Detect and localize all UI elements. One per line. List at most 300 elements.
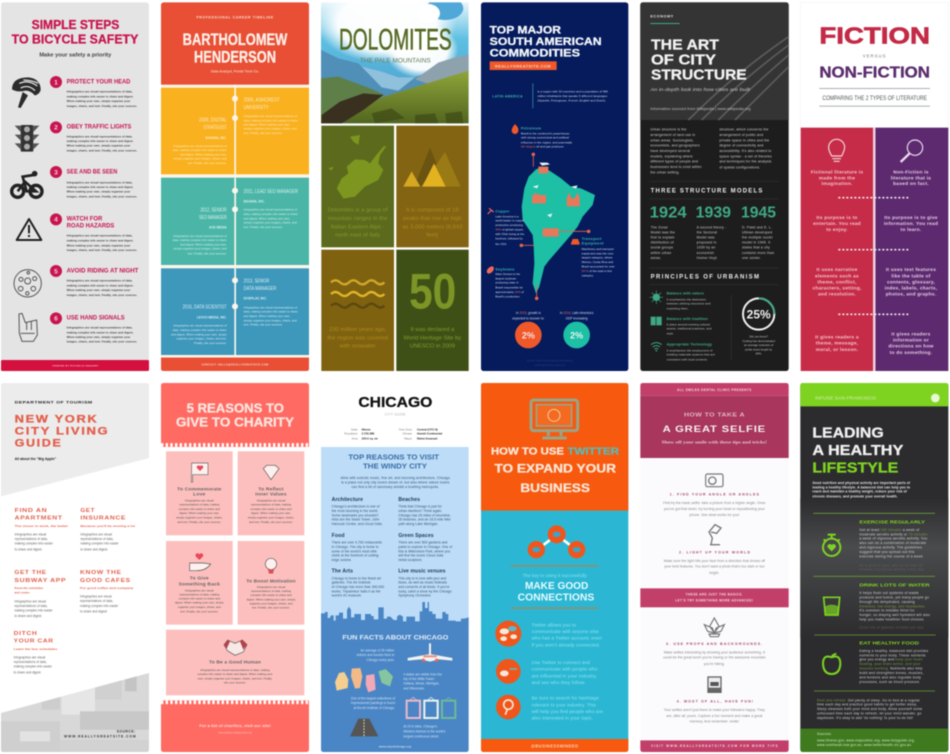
- text: the arts: Chicago is home to the finest art: [332, 576, 381, 580]
- column: non-fiction: Its purpose is to give: [884, 215, 938, 221]
- city facts: [344, 427, 442, 440]
- step 4: ROAD HAZARDS: [67, 223, 114, 229]
- icon: petroleum drop: [512, 124, 518, 134]
- model 1924: Model was the: [651, 230, 675, 234]
- column: non-fiction: directions on how: [888, 344, 934, 350]
- timeline band 2005-2009: [161, 85, 309, 358]
- intro text: [812, 481, 911, 498]
- principle: balance with nature: between utilizing resources and: [667, 302, 711, 306]
- section: food: give you energy and keep your heart: [859, 658, 922, 662]
- panel: reasons to give to charity infographic: [161, 383, 309, 752]
- column: fiction: It uses narrative: [816, 267, 858, 273]
- Latin America intro: million inhabitants that speaks 5 different languages: [537, 94, 608, 98]
- section: water: It's common to mistake thirst for: [859, 609, 915, 613]
- icon: monitor with bird: [531, 400, 578, 438]
- text: the arts: of Chicago has more than 300,000: [332, 585, 384, 589]
- section: exercise: Get at least 150 minutes a week of: [859, 528, 919, 532]
- fact: four states: 4 states are visible from the: [403, 672, 442, 676]
- section: water: tiredness, low energy, and headaches.: [859, 604, 926, 608]
- column: fiction: Fictional literature is: [811, 169, 863, 175]
- city facts: Illinois: [362, 427, 371, 431]
- stat: 2% growth: In 2015, growth is: [516, 311, 541, 315]
- source note: Source: https://www.statista.com/statistics: [527, 360, 574, 363]
- title: TO EXPAND YOUR: [494, 462, 616, 476]
- section: find an apartment: making complex info easier: [15, 542, 53, 546]
- icon: warning triangle: [17, 219, 41, 240]
- title: COMMODITIES: [490, 48, 580, 60]
- timeline band 2013-2016: LEXVO MEDIA, INC.: [197, 315, 227, 319]
- icon: airplane: [408, 643, 452, 662]
- sources footer: Sources:: [817, 732, 832, 736]
- tip 2: 2. LIGHT UP YOUR WORLD: [679, 551, 750, 555]
- step 4: [50, 213, 137, 252]
- did you know note: Cooling has demonstrated: [742, 339, 775, 343]
- column: fiction: entertain. You read: [813, 221, 861, 227]
- timeline band 2013-2016: and digest. When making your own,: [244, 314, 290, 318]
- panel: give something back: digest. When making your own, simply: [175, 601, 224, 605]
- section: ditch your car: YOUR CAR: [14, 639, 54, 645]
- model 1924: The Zonal: [651, 225, 668, 229]
- fact: visitors: Chicago every year.: [366, 658, 394, 662]
- model 1945: [741, 205, 776, 260]
- timeline band 2013-2016: text. Finally, cite your sources.: [244, 323, 283, 327]
- text: copper: the USA.: [495, 242, 507, 246]
- step 4: images, charts, and text. Finally, cite your sources.: [67, 248, 137, 252]
- text: food: chefs at the forefront of cutting-: [332, 554, 379, 558]
- panel: how to use Twitter infographic: [481, 383, 628, 752]
- heading principles of urbanism: PRINCIPLES OF URBANISM: [651, 275, 759, 281]
- heading: make good connections: The key to using it successfully: [523, 573, 587, 578]
- icon: photo: [707, 676, 722, 693]
- footer contact: CONTACT: HELLO@REALLYGREATSITE.COM: [201, 362, 269, 366]
- stat: 2% GDP: GDP increasing: [566, 316, 588, 320]
- step 6: images, charts, and text. Finally, cite your sources.: [67, 340, 137, 344]
- section: get insurance: [80, 508, 135, 551]
- header with title: 5 REASONS TO: [187, 402, 284, 416]
- icon: stopwatch: [823, 535, 840, 556]
- tip 1: [663, 493, 766, 517]
- step 5: images, charts, and text. Finally, cite your sources.: [67, 293, 137, 297]
- panel: give something back: representations of data, making: [179, 592, 220, 596]
- step 4: When making your own, simply organize your: [67, 243, 131, 247]
- principle: appropriate technology: consistent with local contexts: [667, 357, 708, 361]
- intro text: urban areas. Sociologists,: [650, 138, 694, 142]
- section: get insurance: representations of data,: [80, 537, 114, 541]
- tip 2: bright.: [709, 571, 719, 575]
- section: top reasons: can find a bit of sanctuary amidst a bustling metropolis.: [351, 485, 439, 489]
- intro text: the urban setting.: [650, 170, 680, 174]
- step 6: Infographics are visual representations of data,: [67, 326, 133, 330]
- fact: art institute: Impressionist paintings is found: [351, 701, 395, 705]
- text: soybeans: Soybeans: [495, 268, 515, 272]
- timeline band 2013-2016: 2016, DATA SCIENTIST: [183, 305, 227, 311]
- timeline band 2013-2016: Infographics are visual representations of: [173, 324, 227, 328]
- icon: transport car: [571, 239, 580, 245]
- timeline band 2005-2009: UNIVERSITY: [244, 105, 269, 111]
- model 1939: A second theory -: [697, 225, 726, 229]
- model 1945: Ullman developed: [742, 230, 772, 234]
- panel: map of Europe: Dolomites is a group of: [328, 208, 388, 214]
- panel: seawater: the region was covered: [327, 335, 388, 341]
- panel: reflect inner values: simply organize your images, charts,: [248, 515, 294, 519]
- panel: reflect inner values: digest. When making your own,: [251, 511, 291, 515]
- title: VERSUS: [863, 53, 887, 58]
- model 1945: 1945: [741, 205, 776, 222]
- intro text: space syntax - a set of theories: [719, 154, 772, 158]
- city facts: Humid Continental: [417, 432, 442, 436]
- header: Show off your smile with these tips and tricks!: [662, 439, 767, 444]
- website: www.cityofchicago.org: [378, 744, 411, 748]
- intro text: Good nutrition and physical activity are important parts of: [812, 481, 911, 485]
- text: architecture: miss are the Sears Tower, John: [332, 518, 380, 522]
- city facts: State: [351, 427, 358, 431]
- text: copper: with Chile being at the: [495, 232, 525, 236]
- section: water: [859, 582, 931, 630]
- intro text: arrangement of land use in: [650, 133, 695, 137]
- section: find an apartment: FIND AN: [15, 508, 47, 514]
- step 6: 6: [54, 316, 58, 323]
- text: green spaces: this is Millennium Park, where you: [398, 549, 450, 553]
- column: non-fiction: like the table of: [891, 273, 931, 279]
- rest and refresh: Rest and refresh. Get plenty of sleep. Go to bed at a regular: [817, 698, 921, 702]
- tip 1: communicate with anyone else: [532, 629, 599, 635]
- section: get insurance: INSURANCE: [80, 516, 126, 522]
- text: green spaces: metal sculpture.: [398, 558, 423, 562]
- title: THE ART: [651, 37, 719, 53]
- text: transport equipment: category.: [582, 274, 594, 278]
- text: soybeans: Mato Grosso is the: [495, 272, 520, 276]
- principle: balance with tradition: assets, traditional practices, and: [667, 327, 712, 331]
- timeline band 2011-2012: data, making complex info easier to share: [173, 238, 227, 242]
- city facts: Mayor: [404, 436, 412, 440]
- text: soybeans: largest soybean: [495, 276, 517, 280]
- city facts: Population: [344, 432, 358, 436]
- section: get the subway app: and routes: [14, 591, 30, 595]
- panel: reflect inner values: and text. Finally, cite your sources.: [249, 520, 293, 524]
- text: copper: forefront, followed by: [495, 236, 523, 240]
- panel: good human: own, simply organize your images, charts, and text. Finally,: [198, 676, 273, 680]
- timeline band 2011-2012: data, making complex info easier to share: [244, 212, 298, 216]
- timeline band 2011-2012: simply organize your images, charts, and: [244, 221, 297, 225]
- header text: PROFESSIONAL CAREER TIMELINE: [196, 15, 274, 19]
- section: water: help you make healthier food choices.: [859, 618, 925, 622]
- fact: western avenue: longest continuous street.: [403, 734, 439, 738]
- city facts: Climate: [402, 432, 412, 436]
- section: exercise: moderate aerobic activity or 75 minutes: [859, 532, 927, 536]
- icon: soybean: [485, 265, 495, 275]
- band: basics: LET'S TRY SOMETHING MORE ADVANCED!: [675, 599, 753, 603]
- title: [491, 447, 619, 495]
- timeline band 2013-2016: Infographics are visual representations of: [244, 305, 297, 309]
- image: grey city buildings: [0, 671, 150, 753]
- footer: For a list of charities, visit our site!: [199, 723, 271, 728]
- timeline band 2011-2012: simply organize your images, charts, and: [174, 247, 227, 251]
- timeline band 2005-2009: data, making complex info easier to share: [173, 148, 227, 152]
- timeline band 2005-2009: Infographics are visual representations of: [173, 144, 227, 148]
- rest and refresh: daydream. It's okay to add 'do nothing' to your to-do list!: [817, 716, 913, 720]
- step 1: images, charts, and text. Finally, cite your sources.: [67, 104, 137, 108]
- fact: visitors: visitors and tourists flock to: [356, 653, 395, 657]
- source credit: [64, 730, 136, 739]
- title: A HEALTHY: [812, 443, 904, 459]
- column: non-fiction: information or: [893, 338, 929, 344]
- panel: boost motivation: To Boost Motivation: [246, 578, 296, 584]
- panel: commemorate love: Love: [193, 492, 206, 498]
- text: live music: and concerts of all kinds. If you're: [398, 585, 450, 589]
- band: basics: [640, 588, 789, 607]
- section: find an apartment: Infographics are visual: [15, 533, 47, 537]
- source note: www.latinamerica-data.com: [535, 364, 565, 367]
- intro text: degree of connectivity and: [719, 144, 763, 148]
- panel: good human: Infographics are visual representations of data, making: [200, 668, 270, 672]
- panel: commemorate love: Infographics are visual: [185, 498, 214, 502]
- column: non-fiction: literature that is: [891, 175, 931, 181]
- heading: fun facts: FUN FACTS ABOUT CHICAGO: [342, 635, 449, 641]
- step 1: PROTECT YOUR HEAD: [67, 79, 131, 85]
- top bar: INFUSE SAN FRANCISCO: [815, 396, 876, 401]
- step 1: 1: [54, 79, 58, 86]
- donut chart 25%: 25%: [747, 307, 771, 321]
- text: transport equipment: 50 % of the total in this: [582, 269, 612, 273]
- step 3: Infographics are visual representations of data,: [67, 180, 133, 184]
- timeline band 2005-2009: simply organize your images, charts, and: [244, 127, 297, 131]
- timeline band 2013-2016: data, making complex info easier to share: [173, 328, 227, 332]
- panel: good human: To Be a Good Human: [209, 660, 261, 666]
- title: [812, 425, 904, 477]
- header: [481, 383, 628, 511]
- intro text: Urban structure is the: [650, 128, 687, 132]
- header: [640, 383, 789, 458]
- icon: camera: [706, 474, 723, 487]
- icon: traffic light: [15, 125, 39, 152]
- fact: western avenue: Western Avenue is the world's: [403, 729, 446, 733]
- text: architecture: Chicago's architecture is one of: [332, 505, 380, 509]
- tip 1: First try the basic selfie: take a picture from a higher angle. Once: [663, 501, 766, 505]
- step 1: [50, 76, 137, 108]
- principle: balance with tradition: Balance with tradition: [667, 317, 709, 321]
- section: get insurance: Infographics are visual: [80, 533, 112, 537]
- heading three structure models: [649, 181, 779, 199]
- footer handle: @BUSINESSMINDED: [531, 743, 579, 748]
- footer handle: [481, 739, 628, 752]
- tip 2: your best features. You don't want a photo that's too dark or too: [664, 564, 764, 568]
- panel: good human: cite your sources.: [224, 681, 246, 685]
- step 5: When making your own, simply organize your: [67, 288, 131, 292]
- title: CHICAGO: [358, 395, 432, 411]
- panel: reflect inner values: [238, 451, 304, 535]
- intro text: and techniques for the analysis: [719, 160, 772, 164]
- panel: give something back: text. Finally, cite your sources.: [180, 609, 219, 613]
- section: get insurance: GET: [80, 508, 95, 514]
- model 1945: states that a city: [742, 246, 770, 250]
- text: beaches: Chicago has 26 miles of shoreline,: [398, 513, 451, 517]
- section: exercise: minutes of physical activity every day.: [859, 568, 925, 572]
- text: live music: Symphony Orchestra.: [398, 594, 431, 598]
- model 1939: 1939: [696, 205, 731, 222]
- did you know note: [742, 335, 775, 356]
- section: food: EAT HEALTHY FOOD: [859, 641, 919, 646]
- footer contact: [161, 358, 309, 371]
- stat: 2% GDP: [560, 311, 594, 348]
- text: food: some of the world's most elite: [332, 549, 377, 553]
- step 3: When making your own, simply organize your: [67, 190, 131, 194]
- text: green spaces: parks to explore in Chicago. One of: [398, 545, 452, 549]
- timeline band 2011-2012: and digest. When making your own,: [180, 242, 227, 246]
- intro text: leading a healthy lifestyle. A balanced diet can help you to: [812, 485, 910, 489]
- city facts: Central (UTC-6): [417, 427, 438, 431]
- panel: peaks: as 3,000 meters (9,843: [402, 224, 462, 230]
- column: non-fiction: It uses text features: [886, 267, 936, 273]
- column: fiction: theme, message,: [816, 341, 859, 347]
- sources footer: [800, 729, 948, 752]
- step 5: making complex info easier to share and digest.: [67, 283, 134, 287]
- intro text: of spatial configurations.: [719, 166, 760, 170]
- Latin America intro: [492, 83, 608, 108]
- stat: 2% growth: 2%: [522, 330, 535, 340]
- text: copper: world leader in copper: [495, 219, 524, 223]
- panel: boost motivation: Infographics are visual: [257, 585, 286, 589]
- city facts: 2,722,389: [362, 432, 375, 436]
- model 1939: proposed in: [697, 241, 717, 245]
- timeline band 2005-2009: simply organize your images, charts, and: [174, 157, 227, 161]
- text: the arts: [332, 569, 384, 598]
- principle: appropriate technology: It emphasizes the employment of: [667, 348, 713, 352]
- header with title: GIVE TO CHARITY: [176, 415, 295, 429]
- city facts: Time Zone: [399, 427, 412, 431]
- footer: [161, 700, 309, 752]
- tip 3: will help you find people who are: [532, 709, 603, 715]
- panel: give something back: [166, 541, 233, 625]
- text: beaches: path along Lake Michigan.: [398, 522, 438, 526]
- model 1939: the Sectoral: [697, 230, 717, 234]
- principle: appropriate technology: [651, 342, 715, 361]
- Latin America intro: is a region with 20 countries and a population of 586: [537, 90, 608, 94]
- model 1945: model in 1945. It: [742, 241, 770, 245]
- timeline band 2013-2016: 2013, SENIOR: [244, 278, 269, 284]
- section: water: through life dehydrated, causing: [859, 600, 915, 604]
- icon: hand signal: [19, 313, 37, 341]
- tip 1: who has a Twitter account, even: [532, 636, 602, 642]
- title: CITY GUIDE: [385, 412, 406, 416]
- intro text: reach and maintain a healthy weight, reduce your risk of: [812, 490, 908, 494]
- principle: balance with nature: [650, 291, 711, 310]
- column: non-fiction: index, labels, charts,: [885, 285, 938, 291]
- rest and refresh: Sleep cleanses both your mind and body. Allow yourself some: [817, 707, 922, 711]
- panel: 50 world heritage: World Heritage Site by: [403, 335, 461, 341]
- timeline band 2011-2012: text. Finally, cite your sources.: [244, 225, 283, 229]
- tagline: All about the "Big Apple": [15, 457, 57, 461]
- title: BUSINESS: [520, 481, 590, 495]
- model 1924: social groups: [651, 246, 673, 250]
- panel: give something back: Infographics are visual: [185, 588, 214, 592]
- panel: seawater: 230 million years ago,: [329, 327, 387, 333]
- step 4: making complex info easier to share and digest.: [67, 238, 134, 242]
- section: find an apartment: [15, 508, 69, 551]
- source credit: WWW.REALLYGREATSITE.COM: [64, 735, 136, 739]
- panel: great selfie infographic: [640, 383, 789, 752]
- title: Dolomites: DOLOMITES: [339, 23, 452, 56]
- source credit: SOURCE:: [117, 730, 136, 734]
- step 2: Infographics are visual representations of data,: [67, 134, 133, 138]
- panel: map of Europe: north east of Italy: [335, 233, 380, 239]
- timeline band 2013-2016: data, making complex info easier to share: [244, 310, 298, 314]
- step 3: [50, 166, 137, 199]
- step 2: making complex info easier to share and digest.: [67, 139, 134, 143]
- tagline and source: An in-depth look into how cities are built: [649, 87, 751, 92]
- fact: four states: top of the Willis Tower:: [403, 677, 435, 681]
- model 1924: within urban: [651, 251, 671, 255]
- step 1: When making your own, simply organize your: [67, 99, 131, 103]
- section: know the good cafes: KNOW THE: [80, 570, 122, 576]
- timeline band 2005-2009: and digest. When making your own,: [180, 152, 227, 156]
- panel: bicycle safety infographic: [1, 2, 149, 371]
- principle: balance with tradition: style.: [667, 331, 674, 335]
- panel: boost motivation: digest. When making your own, simply: [247, 597, 296, 601]
- source note: [527, 360, 574, 367]
- title: NON-FICTION: [819, 65, 930, 82]
- title: LIFESTYLE: [812, 461, 898, 477]
- step 2: [50, 121, 137, 153]
- panel: boost motivation: complex info easier to share and: [250, 593, 292, 597]
- timeline band 2005-2009: text. Finally, cite your sources.: [188, 161, 227, 165]
- text: transport equipment: Brazil accounted for over: [582, 264, 615, 268]
- column: non-fiction: [875, 128, 948, 371]
- panel: reflect inner values: Infographics are visual: [257, 498, 286, 502]
- tip 2: Make sure the light hits your face from a direction that shows off: [664, 559, 765, 563]
- intro text: different types of people and: [650, 160, 698, 164]
- section: get the subway app: making complex info easier: [14, 609, 53, 613]
- section: know the good cafes: Infographics are visual: [80, 594, 112, 598]
- tip 3: you're hiking.: [704, 662, 725, 666]
- tip 1: if you aren't already connected.: [532, 642, 600, 648]
- section: food: build and strengthen bones, muscles,: [859, 671, 924, 675]
- department label: DEPARTMENT OF TOURISM: [15, 400, 93, 404]
- section: know the good cafes: representations of data,: [80, 599, 113, 603]
- panel: reflect inner values: complex info easier to share and: [250, 507, 292, 511]
- section: know the good cafes: GOOD CAFES: [80, 578, 131, 584]
- text: live music: Live music venues: [398, 569, 446, 575]
- panel: 50 world heritage: It was declared a: [410, 327, 455, 333]
- model 1945: the multiple nuclei: [742, 235, 773, 239]
- fact: four states: and Wisconsin.: [403, 687, 425, 691]
- title: [819, 23, 930, 82]
- section: top reasons: THE WINDY CITY: [363, 464, 427, 471]
- stat: 2% growth: [512, 311, 545, 348]
- fact: visitors: [356, 648, 395, 662]
- title: Dolomites: THE PALE MOUNTAINS: [360, 58, 431, 65]
- text: soybeans: [495, 268, 524, 299]
- stat: 2% GDP: 2%: [570, 330, 583, 340]
- city facts: Rahm Emanuel: [417, 436, 438, 440]
- model 1945: one center.: [742, 256, 761, 260]
- footer band: [640, 740, 789, 752]
- section: top reasons: Alive with eclectic music, fine art, and stunning architecture, Chicago: [341, 476, 450, 480]
- text: green spaces: [398, 533, 452, 562]
- timeline band 2011-2012: BAVANA, INC.: [244, 199, 265, 203]
- header text: Data Analyst, Portal Tech Co.: [211, 70, 259, 74]
- rest and refresh: [817, 698, 922, 720]
- column: fiction: to enjoy.: [826, 227, 848, 233]
- step 6: When making your own, simply organize your: [67, 335, 131, 339]
- column: non-fiction: to learn.: [901, 227, 922, 233]
- did you know note: 20%.: [755, 352, 762, 356]
- model 1939: Homer Hoyt.: [697, 256, 718, 260]
- text: soybeans: Brazil responsible for: [495, 285, 523, 289]
- city facts: 234.0 sq. mi: [362, 436, 378, 440]
- text: beaches: Beaches: [398, 497, 420, 503]
- step 6: USE HAND SIGNALS: [67, 315, 125, 321]
- skyline and fun facts background: [321, 602, 469, 752]
